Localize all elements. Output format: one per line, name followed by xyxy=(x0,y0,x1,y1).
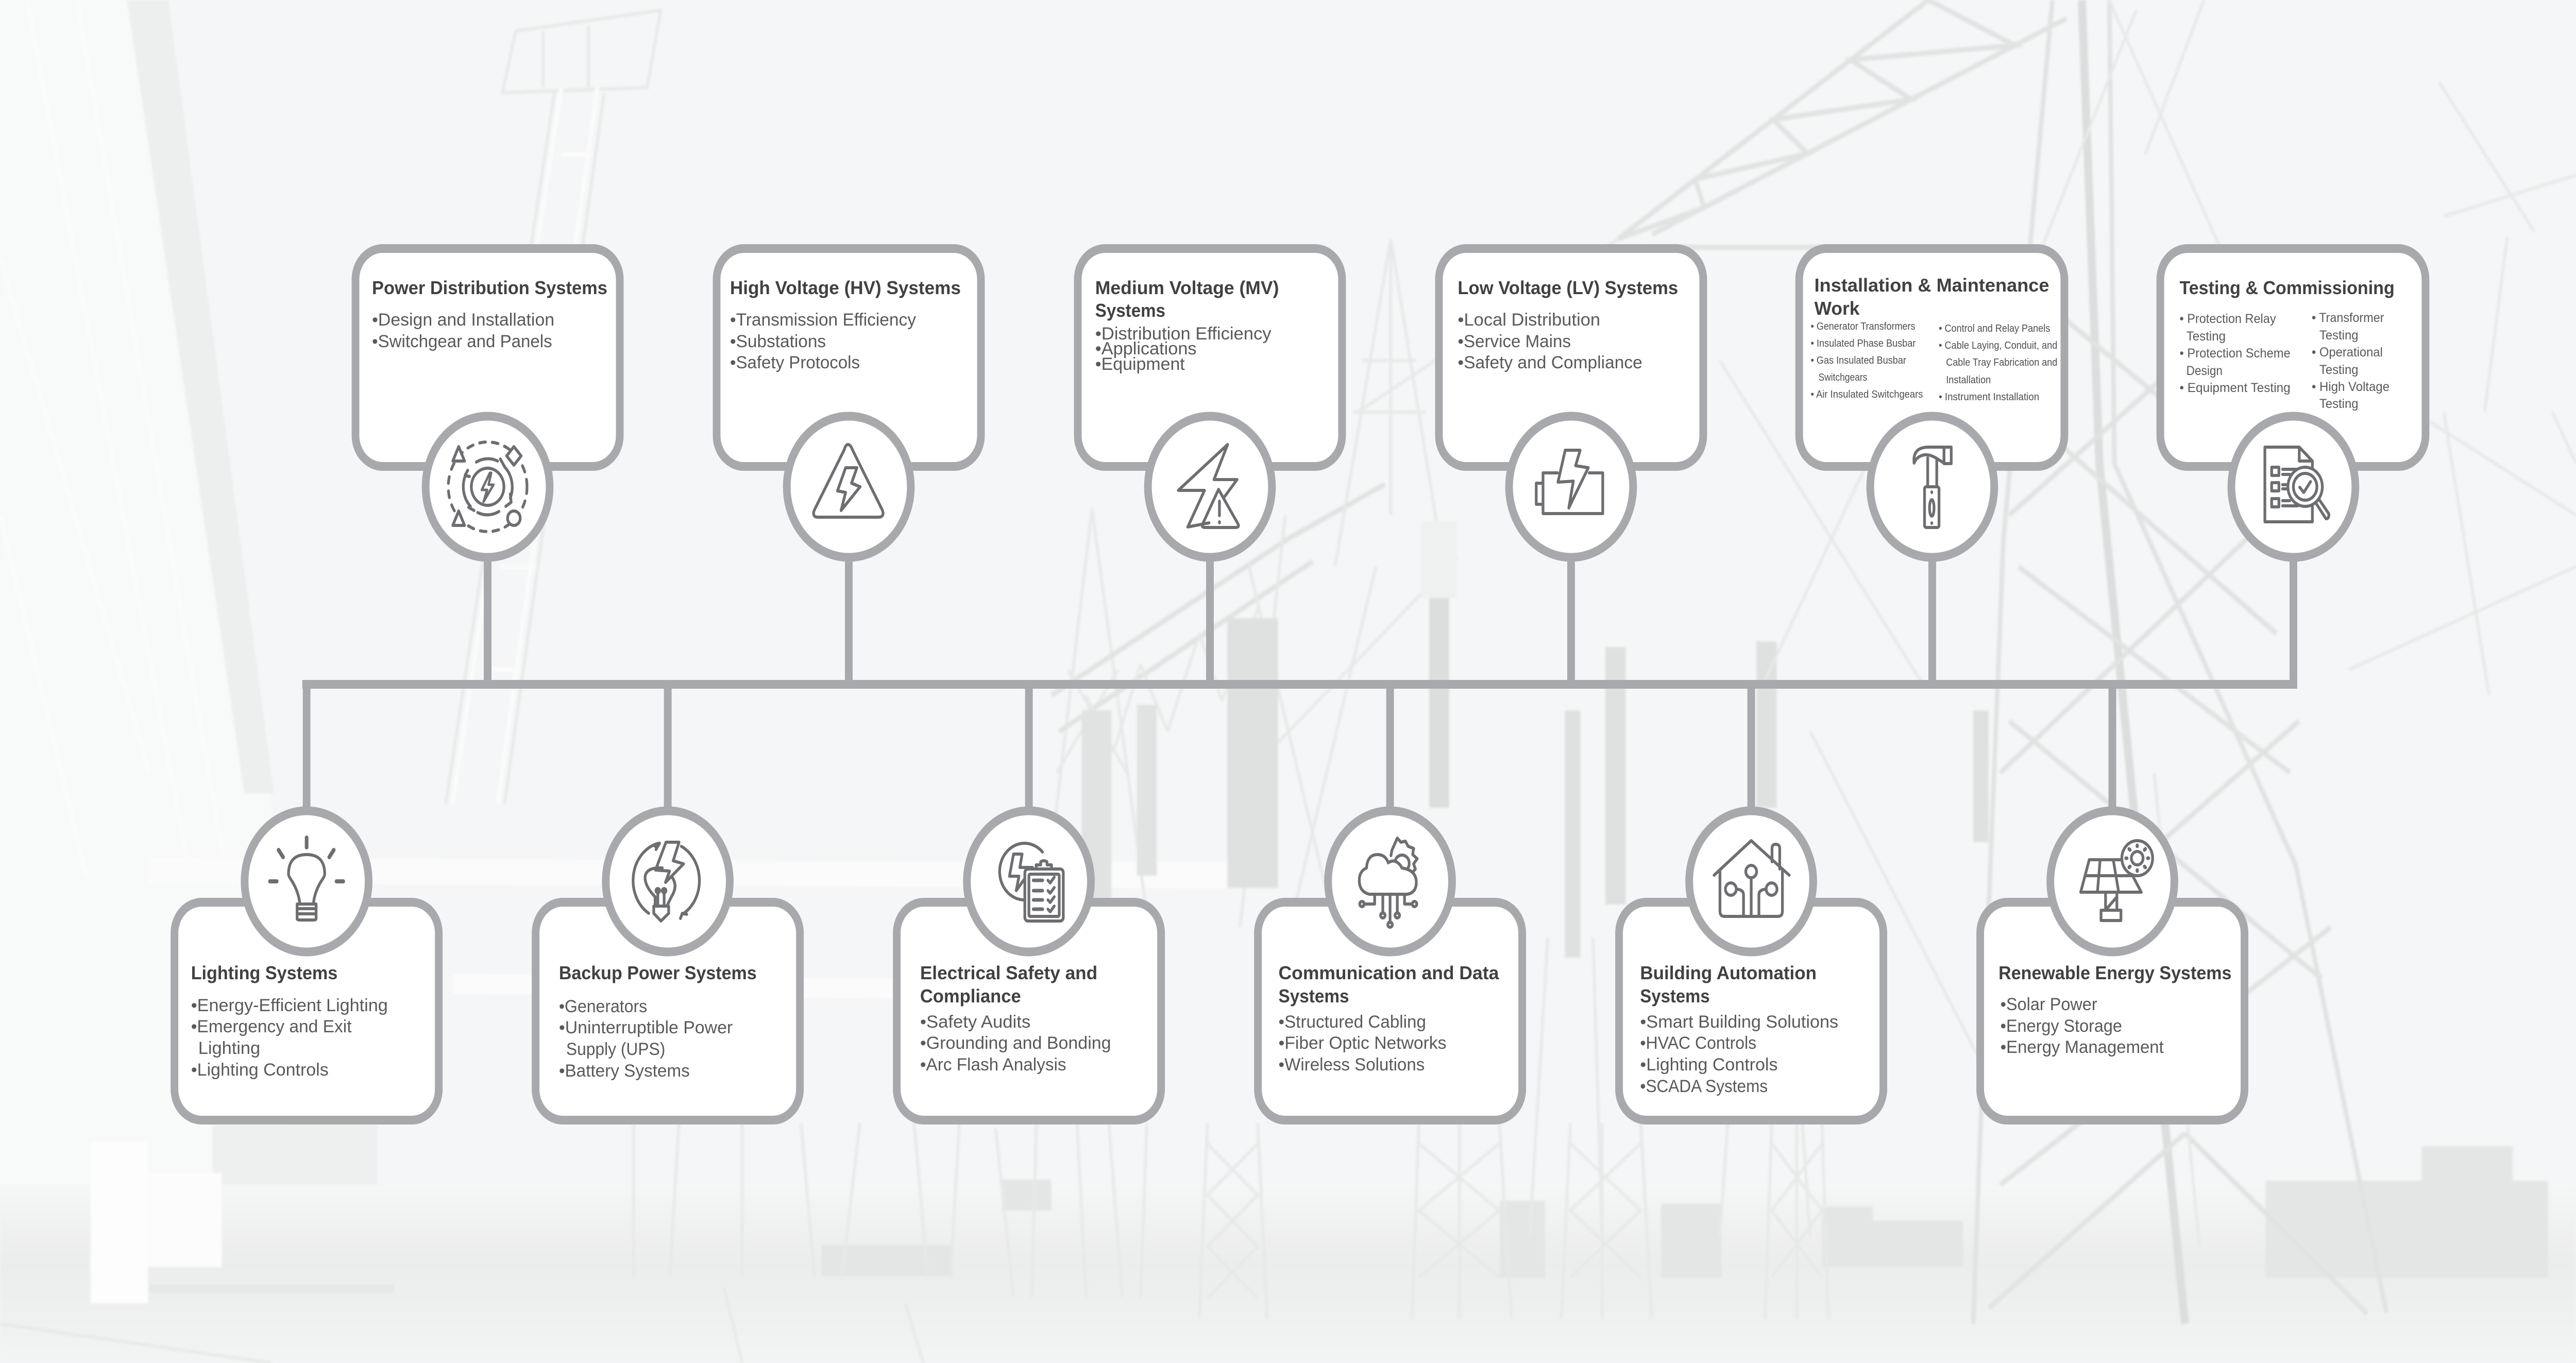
icon: power distribution cycle xyxy=(448,442,527,532)
list: •SCADA Systems xyxy=(1640,1076,1768,1096)
connectors: bottom vertical lines xyxy=(303,680,2116,809)
list: •Energy Storage xyxy=(2001,1016,2122,1035)
list: •Lighting Controls xyxy=(1640,1054,1777,1074)
icon: bolt with warning triangle xyxy=(1178,445,1239,527)
icon: bolt and checklist clipboard xyxy=(999,843,1063,921)
list: right column: Testing xyxy=(2319,328,2358,342)
list xyxy=(1279,1012,1446,1074)
list: •Wireless Solutions xyxy=(1279,1054,1425,1074)
list: right column: Testing xyxy=(2319,397,2358,411)
list: •Switchgear and Panels xyxy=(372,331,552,351)
insulators xyxy=(1081,710,1111,899)
list xyxy=(920,1012,1111,1074)
list: •Service Mains xyxy=(1458,331,1571,351)
icon: high voltage triangle xyxy=(814,445,883,517)
list: •Grounding and Bonding xyxy=(920,1033,1111,1052)
list: •Energy Management xyxy=(2001,1037,2164,1057)
list: left column: • Protection Scheme xyxy=(2179,346,2291,360)
list: •Local Distribution xyxy=(1458,310,1600,329)
heading: Building Automation xyxy=(1640,963,1817,984)
list: left column: • Gas Insulated Busbar xyxy=(1811,354,1906,366)
icon: battery with bolt xyxy=(1536,450,1603,514)
list: left column: • Air Insulated Switchgears xyxy=(1811,388,1923,400)
icon: document with magnifier xyxy=(2265,447,2329,522)
big transmission tower xyxy=(1358,0,2576,1324)
list: •Safety Audits xyxy=(920,1012,1030,1031)
list: •Structured Cabling xyxy=(1279,1012,1426,1031)
heading: Electrical Safety and xyxy=(920,963,1097,984)
heading: Power Distribution Systems xyxy=(372,278,607,298)
heading: Testing & Commissioning xyxy=(2179,278,2395,298)
connector: horizontal bus xyxy=(302,680,2297,689)
list: •Transmission Efficiency xyxy=(730,310,916,329)
panel: Low Voltage (LV) Systems xyxy=(1439,248,1703,557)
panel: Renewable Energy Systems xyxy=(1980,811,2245,1120)
list: left column xyxy=(1811,320,1923,400)
list: •Battery Systems xyxy=(559,1061,690,1080)
list xyxy=(730,310,916,372)
list: left column: • Insulated Phase Busbar xyxy=(1811,337,1916,349)
list: •Equipment xyxy=(1095,354,1185,373)
heading: Renewable Energy Systems xyxy=(1998,963,2232,984)
heading: Low Voltage (LV) Systems xyxy=(1458,278,1678,298)
list: Supply (UPS) xyxy=(566,1039,665,1059)
list: left column xyxy=(2179,312,2291,395)
list: right column: Cable Tray Fabrication and xyxy=(1946,356,2057,368)
list: •Solar Power xyxy=(2001,994,2097,1014)
list: •Applications xyxy=(1095,338,1197,358)
list: left column: • Equipment Testing xyxy=(2179,381,2291,395)
heading: Medium Voltage (MV) xyxy=(1095,278,1279,298)
list: •Substations xyxy=(730,331,826,351)
panel: Power Distribution Systems xyxy=(355,248,620,557)
list: •Energy-Efficient Lighting xyxy=(191,995,388,1015)
panel: Backup Power Systems xyxy=(536,811,800,1120)
panel: Communication and Data Systems xyxy=(1258,811,1522,1120)
panel: Lighting Systems xyxy=(175,811,439,1120)
panel: Installation & Maintenance Work xyxy=(1799,248,2064,557)
list: Lighting xyxy=(198,1038,260,1058)
list: left column: • Generator Transformers xyxy=(1811,320,1915,332)
list: right column xyxy=(1939,322,2057,402)
list: right column: • High Voltage xyxy=(2312,380,2389,394)
horizontal pipes xyxy=(149,871,1258,876)
list xyxy=(1640,1012,1838,1096)
list: right column: • Transformer xyxy=(2312,311,2384,325)
list: right column: • Instrument Installation xyxy=(1939,391,2039,402)
list: •Smart Building Solutions xyxy=(1640,1012,1838,1031)
list: right column: • Cable Laying, Conduit, and xyxy=(1939,339,2057,351)
list: right column: • Operational xyxy=(2312,345,2383,359)
list: left column: • Protection Relay xyxy=(2179,312,2276,326)
list: right column: • Control and Relay Panels xyxy=(1939,322,2050,334)
list xyxy=(372,310,554,351)
heading: Backup Power Systems xyxy=(559,963,757,984)
panel: Communication and Data Systems: Systems xyxy=(1279,986,1349,1007)
panel: High Voltage (HV) Systems xyxy=(717,248,981,557)
list: •Lighting Controls xyxy=(191,1060,329,1079)
list: •Emergency and Exit xyxy=(191,1016,352,1036)
list: •Safety and Compliance xyxy=(1458,352,1642,372)
heading: Communication and Data xyxy=(1279,963,1500,984)
icon: solar panel with sun xyxy=(2081,841,2153,921)
list: right column: Installation xyxy=(1946,374,1991,385)
panel: Electrical Safety and Compliance xyxy=(897,811,1161,1120)
distant buildings xyxy=(821,1146,2548,1278)
list: •Design and Installation xyxy=(372,310,554,329)
list: •Safety Protocols xyxy=(730,352,860,372)
icon: hammer xyxy=(1914,447,1951,527)
heading: Installation & Maintenance xyxy=(1815,275,2049,296)
list: left column: Switchgears xyxy=(1819,371,1867,383)
list xyxy=(191,995,388,1079)
list xyxy=(1458,310,1642,372)
list xyxy=(2001,994,2164,1057)
icon: light bulb xyxy=(270,838,343,920)
connectors: top vertical lines xyxy=(484,559,2297,689)
panel: Electrical Safety and Compliance: Compliance xyxy=(920,986,1021,1007)
heading: High Voltage (HV) Systems xyxy=(730,278,961,298)
icon: cloud with gear and circuit xyxy=(1359,838,1417,927)
list: •Generators xyxy=(559,996,647,1016)
list: •Arc Flash Analysis xyxy=(920,1054,1066,1074)
icon: smart house xyxy=(1714,841,1789,916)
list: right column: Testing xyxy=(2319,363,2358,377)
list: •Fiber Optic Networks xyxy=(1279,1033,1446,1052)
list: •Uninterruptible Power xyxy=(559,1017,733,1037)
panel: Medium Voltage (MV) Systems: Systems xyxy=(1095,300,1165,321)
list: right column xyxy=(2312,311,2389,411)
list: •Distribution Efficiency xyxy=(1095,323,1271,343)
icon: bulb with bolt and cycle arrows xyxy=(633,842,700,921)
heading: Lighting Systems xyxy=(191,963,337,984)
list xyxy=(559,996,733,1080)
panel: Testing & Commissioning xyxy=(2160,248,2426,557)
panel: Installation & Maintenance Work: Work xyxy=(1815,298,1860,319)
panel: Medium Voltage (MV) Systems xyxy=(1078,248,1342,557)
list: •HVAC Controls xyxy=(1640,1033,1756,1052)
list: left column: Design xyxy=(2187,364,2223,378)
substation lattice structures xyxy=(634,1123,1828,1319)
list xyxy=(1095,323,1271,373)
panel: Building Automation Systems xyxy=(1619,811,1884,1120)
light tower, left xyxy=(446,10,661,804)
list: left column: Testing xyxy=(2187,329,2226,343)
panel: Building Automation Systems: Systems xyxy=(1640,986,1710,1007)
